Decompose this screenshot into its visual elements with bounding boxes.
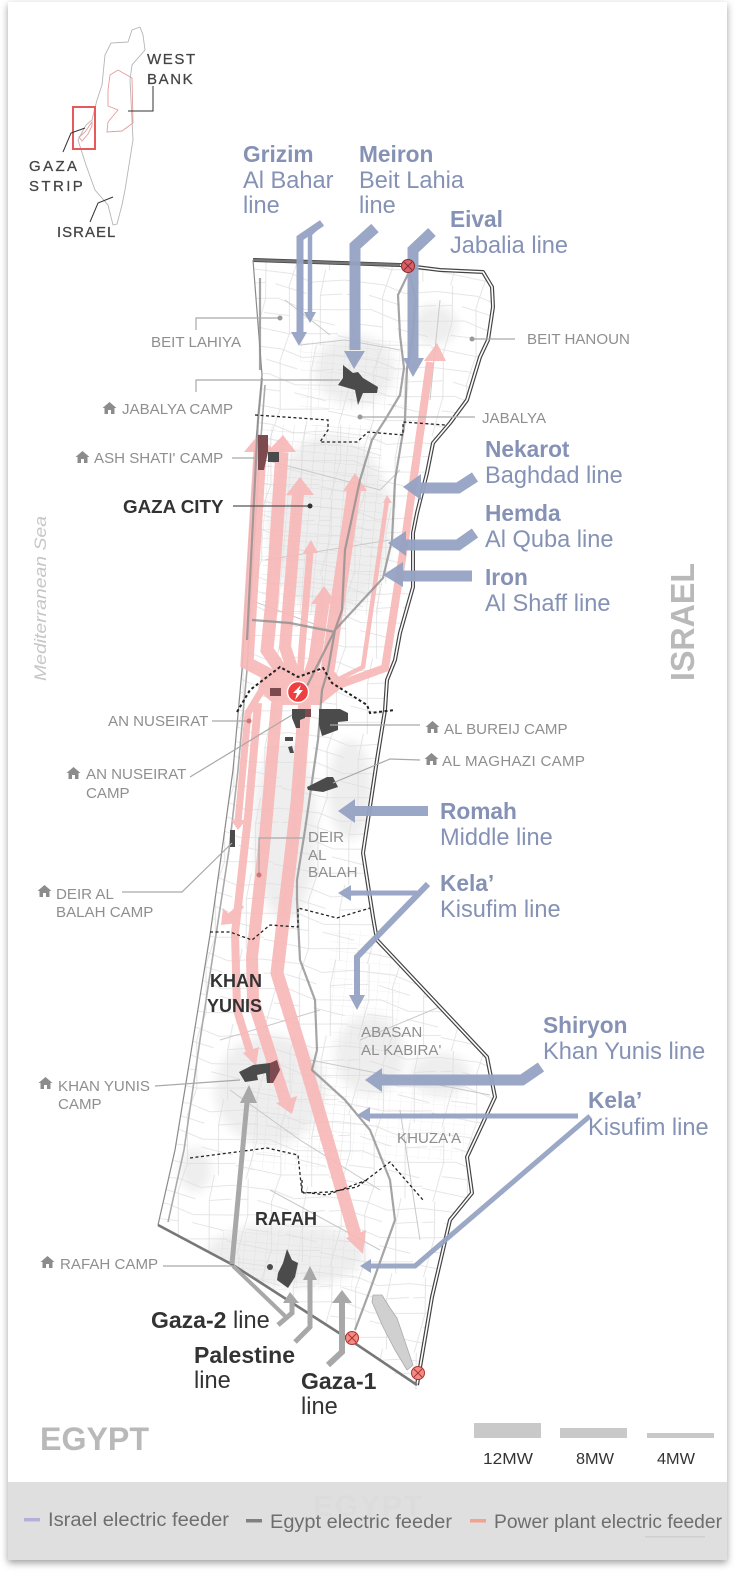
scale legend [474,1423,714,1468]
label: Grizim: Al Bahar [243,168,334,194]
label: Grizim [243,141,334,219]
label: Hemda [485,500,614,553]
feeder: Hemda [388,531,475,556]
camp label: Khan Yunis: KHAN YUNIS [58,1078,150,1095]
Egypt feeder: Khan Yunis [232,1085,257,1264]
Gaza Strip base map [150,250,510,1400]
place labels: BEIT HANOUN [527,331,630,348]
label: Shiryon: Shiryon [543,1012,627,1038]
inset: West Bank outline [107,70,133,132]
colour legend: EGYPT [313,1490,422,1523]
feeder: north 5 [307,586,337,683]
city label: Abasan al Kabira: AL KABIRA' [361,1042,441,1059]
label: Iron [485,564,610,617]
inset label: Gaza Strip: GAZA [29,158,79,175]
label: Eival [450,206,568,259]
camp label: Al Maghazi: AL MAGHAZI CAMP [442,753,585,770]
feeder: north-east long [333,343,446,687]
camp label: Ash Shati': ASH SHATI' CAMP [94,450,223,467]
feeder: south 2 [235,703,259,1066]
leader lines and dots [122,316,515,1266]
feeder: south 4 [277,700,366,1254]
scale: 4MW: 4MW [657,1451,696,1468]
label: Eival: Jabalia line [450,233,568,259]
feeder: south 1 [231,690,262,830]
feeder: north 2 [267,435,296,692]
city label: Khan Yunis [207,971,262,1016]
inset label: Israel: ISRAEL [57,224,116,241]
place labels: BEIT LAHIYA [151,334,242,351]
icon: power plant [288,682,308,702]
feeder hub [258,672,345,705]
label: Kela' south: Kisufim line [588,1115,709,1141]
feeder: Kela' middle [338,884,428,1010]
camp label: Khan Yunis: CAMP [58,1096,102,1113]
label: Nekarot: Baghdad line [485,463,623,489]
camp label: Rafah: RAFAH CAMP [60,1256,158,1273]
Egypt feeder arrows [232,1085,352,1365]
label: Shiryon [543,1012,705,1065]
inset label: Gaza Strip: STRIP [29,178,85,195]
icon: border crossing north [402,260,414,272]
feeder: north 7 [337,495,392,680]
label: Iron: Al Shaff line [485,591,610,617]
label: Romah: Middle line [440,825,553,851]
road network [247,272,416,1330]
city label: Deir al Balah: DEIR [308,829,344,846]
street texture [150,250,510,1400]
label: Gaza-2: Gaza-2 line [151,1307,270,1334]
label: Meiron: Beit Lahia [359,168,465,194]
city label: Abasan al Kabira [361,1024,441,1059]
legend: power plant feeder: Power plant electric feeder [494,1512,723,1533]
label: Kela' south [588,1087,709,1141]
scale: 12MW [474,1423,541,1468]
place labels: JABALYA [482,410,547,427]
label: Meiron [359,141,465,219]
label: Iron: Iron [485,564,528,590]
scale: 4MW [647,1433,714,1468]
feeder: Shiryon [365,1067,541,1092]
airport [372,1295,413,1370]
icon: border crossing south [346,1332,358,1344]
place labels [38,331,630,1273]
camp label: Deir al Balah [38,885,153,921]
camp label: An Nuseirat [66,766,186,802]
label: Hemda: Al Quba line [485,527,614,553]
camp label: Deir al Balah: BALAH CAMP [56,904,153,921]
Egypt feeder: Gaza-2 line [233,1266,299,1325]
Israel feeder arrows [291,223,590,1273]
footer band [8,1482,727,1560]
camp label: Jabalya: JABALYA CAMP [122,401,233,418]
inset label: West Bank: WEST [147,51,197,68]
Egypt feeder: Palestine line [295,1266,317,1342]
place labels: AN NUSEIRAT [108,713,208,730]
inset locator map [29,27,197,241]
feeder: north 6 [323,473,367,693]
label: Kela' south: Kela’ [588,1087,642,1113]
scale: 8MW: 8MW [576,1451,615,1468]
inset: Gaza shape [79,122,92,141]
label: Shiryon: Khan Yunis line [543,1039,705,1065]
camp label: Khan Yunis [38,1077,150,1113]
feeder: south branch [221,905,242,925]
label: Eival: Eival [450,206,503,232]
label: Kela' middle: Kela’ [440,870,494,896]
label: Romah [440,798,553,851]
country label: Egypt: EGYPT [40,1421,149,1457]
label: Nekarot: Nekarot [485,436,570,462]
label: Meiron: Meiron [359,141,433,167]
strip border [158,260,495,1385]
inset label: Gaza Strip [29,128,85,195]
inset: red locator rectangle [73,107,95,149]
city label: Deir al Balah: BALAH [308,864,358,881]
scale: 8MW [560,1428,627,1468]
feeder: Eival [403,232,432,377]
label: Romah: Romah [440,798,517,824]
governorate boundaries [190,415,445,1200]
label: Gaza-1 [301,1368,377,1420]
feeder: north 3 [285,477,314,683]
label: Grizim: line [243,193,280,219]
feeder: Kela' south, diagonal [360,1116,590,1273]
feeder: west coast [244,434,298,690]
inset label: West Bank: BANK [147,71,194,88]
refugee camp footprints [230,365,378,1288]
legend: Israel feeder: Israel electric feeder [48,1510,230,1531]
label: Nekarot [485,436,623,489]
feeder: Romah [338,799,428,823]
scale: 12MW: 12MW [483,1451,534,1468]
camp label: An Nuseirat: AN NUSEIRAT [86,766,186,783]
label: Palestine: line [194,1368,231,1394]
camp label: An Nuseirat: CAMP [86,785,130,802]
label: Kela' middle: Kisufim line [440,897,561,923]
feeder line labels [151,141,709,1420]
feeder: Meiron [344,228,375,369]
feeder: Nekarot [403,474,475,500]
city labels over arrows [207,971,317,1229]
feeder: south 3 [252,703,297,1114]
camp label: Deir al Balah: DEIR AL [56,886,114,903]
label: Gaza-1: Gaza-1 [301,1368,377,1394]
colour legend [24,1490,723,1538]
label: Gaza-1: line [301,1394,338,1420]
label: Palestine: Palestine [194,1342,295,1368]
city label: Deir al Balah [308,829,358,881]
label: Grizim: Grizim [243,141,314,167]
city label: Gaza City: GAZA CITY [123,496,224,517]
camp label: Al Bureij: AL BUREIJ CAMP [444,721,568,738]
label: Hemda: Hemda [485,500,561,526]
feeder: Iron [383,562,472,587]
city label: Rafah: RAFAH [255,1209,317,1229]
city label: Abasan al Kabira: ABASAN [361,1024,422,1041]
city label: Deir al Balah: AL [308,847,326,864]
label: Meiron: line [359,193,396,219]
label: Palestine [194,1342,295,1394]
label: Kela' middle [440,870,561,923]
icon: border crossing south-east [412,1366,424,1380]
city label: Khuza'a: KHUZA'A [397,1130,462,1147]
inset label: West Bank [128,51,197,111]
inset label: Israel [57,197,116,241]
feeder: Grizim [291,223,322,346]
city label: Khan Yunis: KHAN [210,971,262,991]
feeder: north 4 [300,540,318,677]
power plant feeder arrows [221,343,446,1254]
country label: Israel: ISRAEL [664,563,701,681]
inset: Israel outline [78,27,145,225]
sea label: Mediterranean Sea [31,516,50,681]
legend: Egypt feeder: Egypt electric feeder [270,1512,453,1533]
Egypt feeder: Gaza-1 line [328,1290,352,1365]
feeder: Kela' south, horizontal [357,1107,578,1122]
city label: Khan Yunis: YUNIS [207,996,262,1016]
